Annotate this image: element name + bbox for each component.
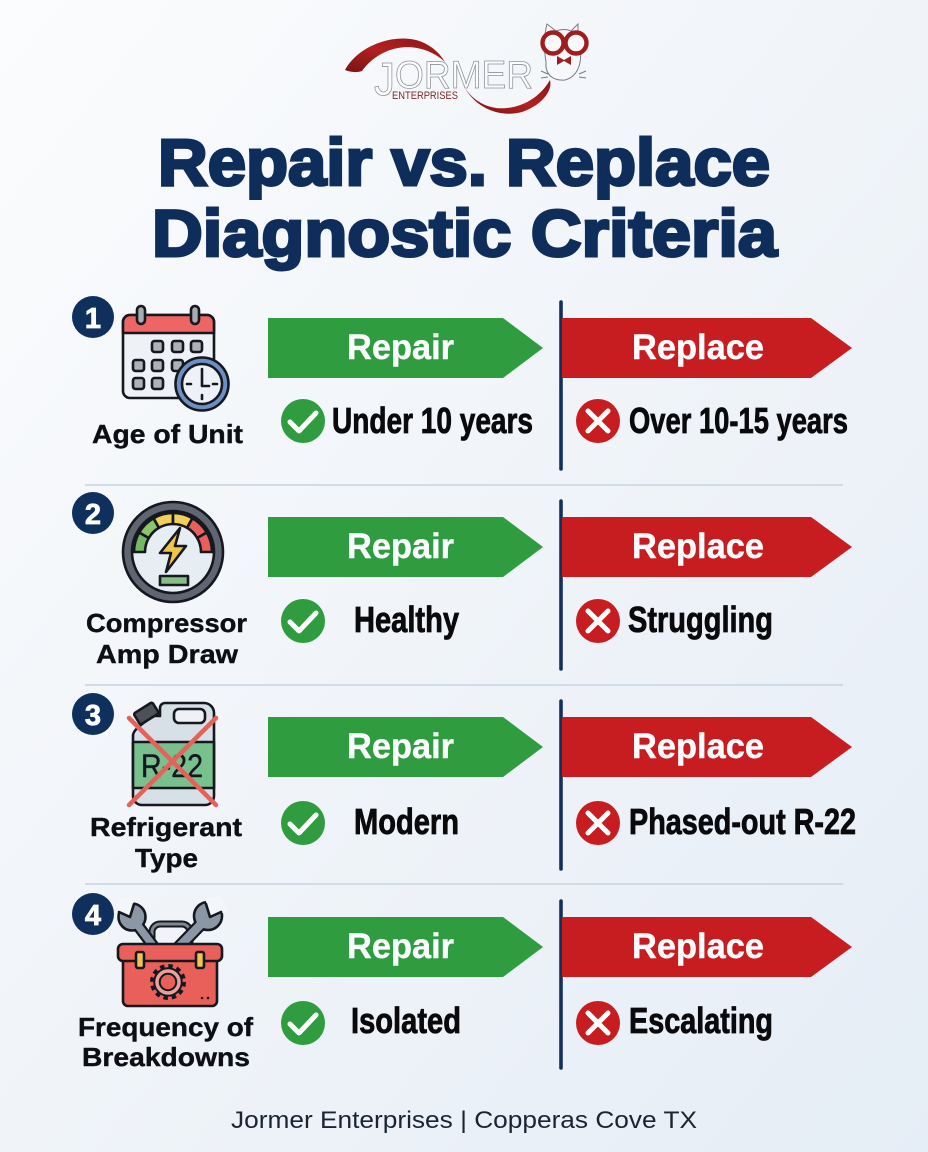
number badge 4 — [72, 893, 114, 935]
label — [86, 608, 247, 669]
repair criterion: Isolated — [351, 1000, 461, 1041]
title: Diagnostic Criteria — [152, 196, 778, 270]
divider line — [559, 302, 563, 469]
check icon — [281, 801, 325, 845]
repair arrow: Repair — [347, 727, 454, 766]
repair arrow — [268, 917, 543, 977]
repair criterion: Healthy — [354, 599, 459, 640]
replace arrow: Replace — [632, 927, 764, 966]
row 4: frequency of breakdowns — [72, 893, 852, 1072]
x icon — [576, 1001, 620, 1045]
x icon — [576, 399, 620, 443]
x icon — [576, 801, 620, 845]
label: Type — [135, 843, 198, 873]
repair arrow — [268, 517, 543, 577]
number badge 1: 1 — [85, 303, 101, 335]
number badge 3: 3 — [85, 700, 101, 732]
icon: crossed-out R-22 jug — [129, 702, 216, 805]
replace arrow: Replace — [632, 727, 764, 766]
title: Repair vs. Replace — [158, 125, 770, 199]
divider line — [559, 701, 563, 869]
title — [152, 125, 778, 270]
number badge 4: 4 — [85, 900, 101, 932]
number badge 2 — [72, 492, 114, 534]
label: Amp Draw — [96, 639, 239, 669]
row 2: compressor amp draw — [72, 492, 852, 669]
repair arrow: Repair — [347, 328, 454, 367]
replace criterion: Struggling — [628, 599, 773, 640]
replace arrow: Replace — [632, 328, 764, 367]
replace criterion: Escalating — [629, 1000, 773, 1041]
repair arrow: Repair — [347, 927, 454, 966]
check icon — [281, 599, 325, 643]
label — [90, 812, 242, 873]
replace criterion: Over 10-15 years — [629, 400, 848, 441]
footer: Jormer Enterprises | Copperas Cove TX — [231, 1107, 697, 1134]
number badge 2: 2 — [85, 499, 101, 531]
label: Frequency of — [78, 1012, 253, 1042]
repair arrow: Repair — [347, 527, 454, 566]
replace arrow — [562, 717, 852, 777]
icon: toolbox with wrenches — [113, 896, 228, 1006]
logo: Jormer Enterprises: J — [374, 53, 395, 105]
row 3: refrigerant type — [72, 693, 856, 873]
icon: crossed-out R-22 jug: R-22 — [141, 748, 203, 784]
replace arrow — [562, 517, 852, 577]
replace arrow — [562, 917, 852, 977]
repair criterion: Modern — [354, 801, 459, 842]
repair arrow — [268, 318, 543, 378]
repair arrow — [268, 717, 543, 777]
label: Age of Unit — [92, 419, 243, 449]
number badge 3 — [72, 693, 114, 735]
check icon — [281, 399, 325, 443]
replace arrow — [562, 318, 852, 378]
logo: Jormer Enterprises: ORMER — [395, 54, 533, 97]
divider line — [559, 901, 563, 1068]
repair criterion: Under 10 years — [332, 400, 533, 441]
label: Breakdowns — [82, 1042, 250, 1072]
label: Compressor — [86, 608, 247, 638]
logo: Jormer Enterprises: ENTERPRISES — [392, 90, 458, 102]
replace criterion: Phased-out R-22 — [629, 801, 856, 842]
label: Refrigerant — [90, 812, 242, 842]
check icon — [281, 1001, 325, 1045]
x icon — [576, 599, 620, 643]
replace arrow: Replace — [632, 527, 764, 566]
icon: calendar with clock — [123, 306, 228, 410]
row 1: age of unit — [72, 296, 852, 469]
logo: Jormer Enterprises — [345, 24, 586, 114]
icon: gauge with lightning bolt — [123, 502, 223, 602]
number badge 1 — [72, 296, 114, 338]
divider line — [559, 501, 563, 669]
label — [78, 1012, 253, 1072]
